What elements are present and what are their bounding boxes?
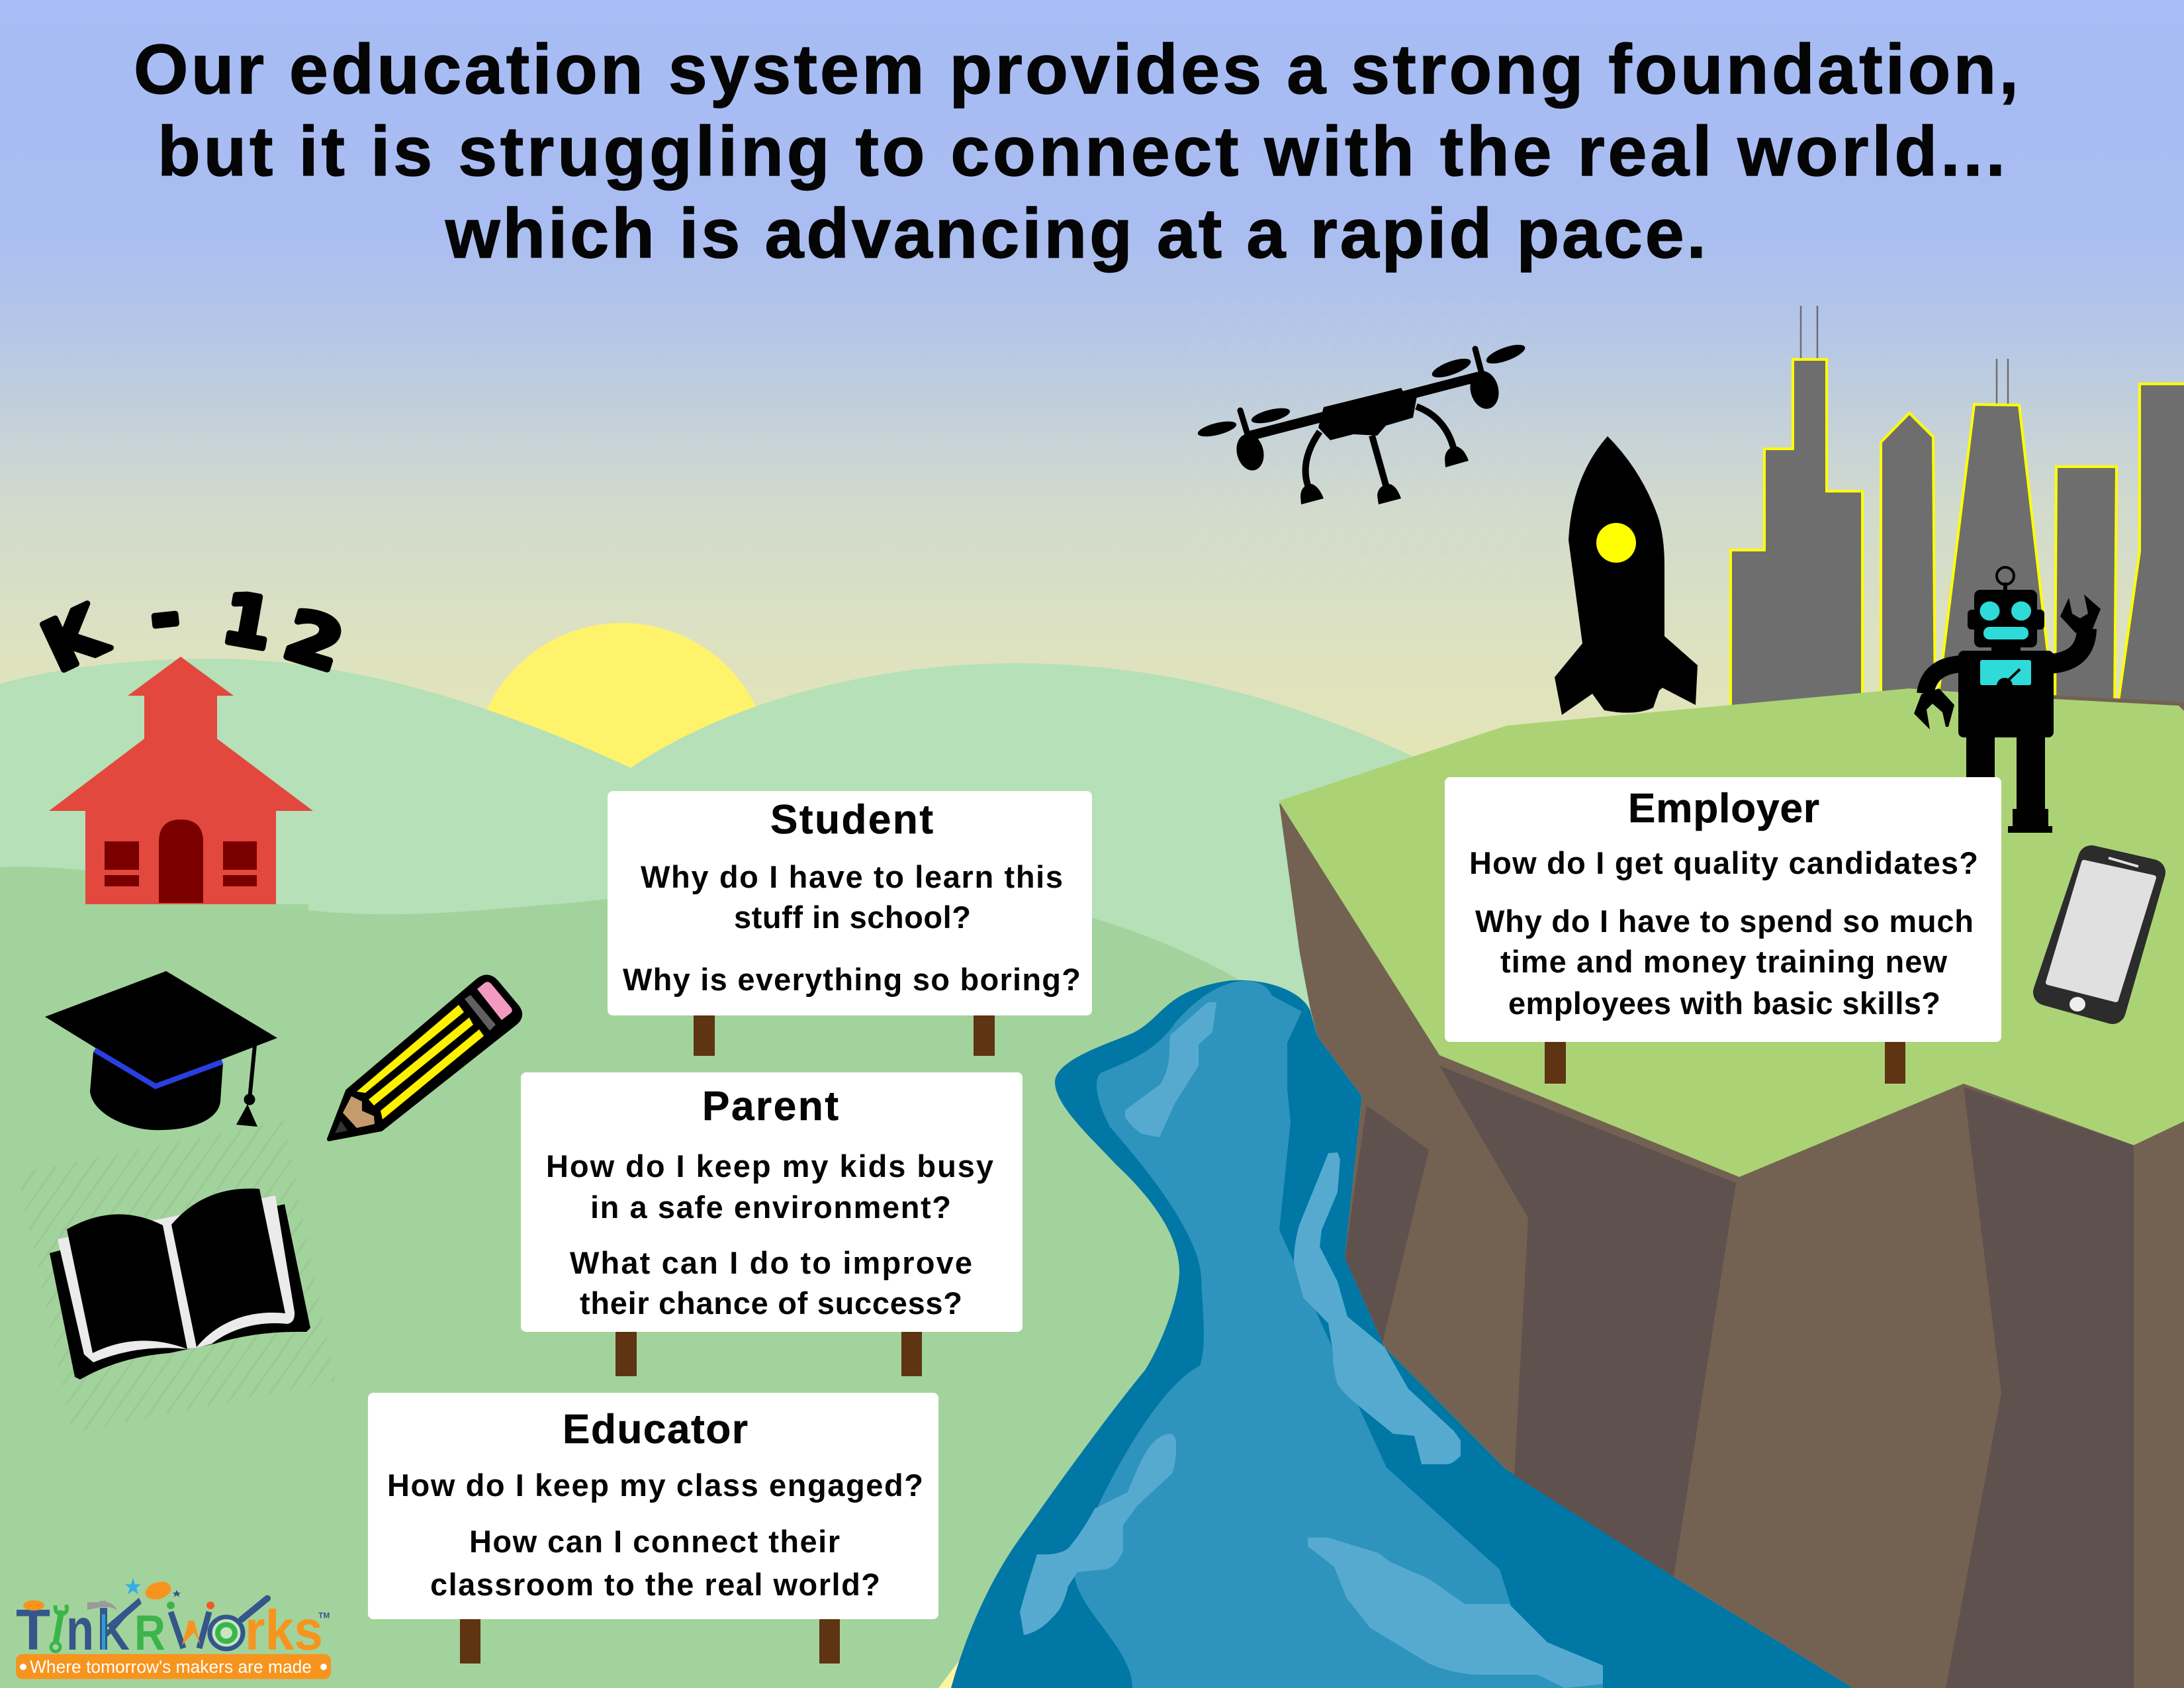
icon: open book (17, 1121, 336, 1433)
employer questions: time and money training new (1500, 944, 1947, 979)
student questions: Why do I have to learn this (641, 859, 1063, 894)
logo: TinkRWorks: n (66, 1597, 94, 1663)
educator questions: How can I connect their (469, 1524, 840, 1559)
educator questions (387, 1468, 923, 1602)
river (951, 980, 1853, 1688)
parent questions (546, 1149, 993, 1321)
cliff grass top (1279, 688, 2184, 1177)
K-12 curved label: 2 (276, 594, 352, 687)
employer questions: Why do I have to spend so much (1475, 904, 1974, 939)
title: Our education system provides a strong foundation, (134, 30, 2019, 109)
title (134, 30, 2019, 273)
student questions: stuff in school? (734, 900, 971, 935)
panel: educator sign (368, 1393, 938, 1664)
logo: TinkRWorks: T (16, 1597, 50, 1662)
river highlights (1020, 1002, 1603, 1688)
icon: red schoolhouse (49, 657, 313, 904)
cliff shadow facets (1345, 1066, 2134, 1688)
title: but it is struggling to connect with the real world... (158, 113, 2005, 191)
heading: Parent: Parent (702, 1084, 839, 1129)
heading: Employer: Employer (1628, 786, 1819, 831)
icon: drone (1197, 341, 1527, 504)
panel: parent sign (521, 1072, 1023, 1376)
logo: TinkRWorks: R (134, 1605, 165, 1661)
logo: TinkRWorks: rks (245, 1599, 323, 1662)
K-12 curved label: 1 (217, 577, 278, 665)
title: which is advancing at a rapid pace. (445, 195, 1706, 273)
sky background (0, 0, 2184, 761)
icon: rocket (1555, 436, 1698, 715)
heading: Student: Student (770, 797, 933, 843)
back hills (0, 659, 1416, 1125)
icon: graduation cap (45, 971, 277, 1130)
parent questions: their chance of success? (580, 1286, 962, 1321)
heading: Educator: Educator (563, 1407, 748, 1452)
K-12 curved label: K (31, 590, 118, 688)
educator questions: classroom to the real world? (430, 1567, 880, 1602)
icon: pencil (329, 976, 520, 1139)
logo: TinkRWorks: Where tomorrow's makers are made (30, 1656, 312, 1677)
logo: TinkRWorks (16, 1578, 331, 1679)
icon: smartphone (2046, 858, 2154, 1011)
logo: TinkRWorks: TM (318, 1611, 330, 1620)
K-12 curved label: - (146, 574, 183, 657)
student questions: Why is everything so boring? (623, 962, 1081, 997)
cliff (1279, 688, 2184, 1688)
front hill (0, 867, 1317, 1688)
city skyline (1731, 306, 2184, 715)
yellow ground sliver (938, 1658, 961, 1688)
logo: TinkRWorks: K (98, 1603, 130, 1661)
icon: robot (1914, 567, 2101, 833)
sun (473, 623, 771, 921)
employer questions: employees with basic skills? (1508, 986, 1940, 1021)
parent questions: How do I keep my kids busy (546, 1149, 993, 1184)
panel: employer sign (1445, 777, 2001, 1084)
river inner water (1074, 981, 1603, 1688)
employer questions: How do I get quality candidates? (1469, 845, 1978, 880)
K-12 curved label (31, 574, 352, 688)
panel: student sign (608, 791, 1092, 1056)
employer questions (1469, 845, 1978, 1021)
student questions (623, 859, 1081, 997)
parent questions: What can I do to improve (570, 1245, 972, 1280)
educator questions: How do I keep my class engaged? (387, 1468, 923, 1503)
parent questions: in a safe environment? (590, 1190, 951, 1225)
